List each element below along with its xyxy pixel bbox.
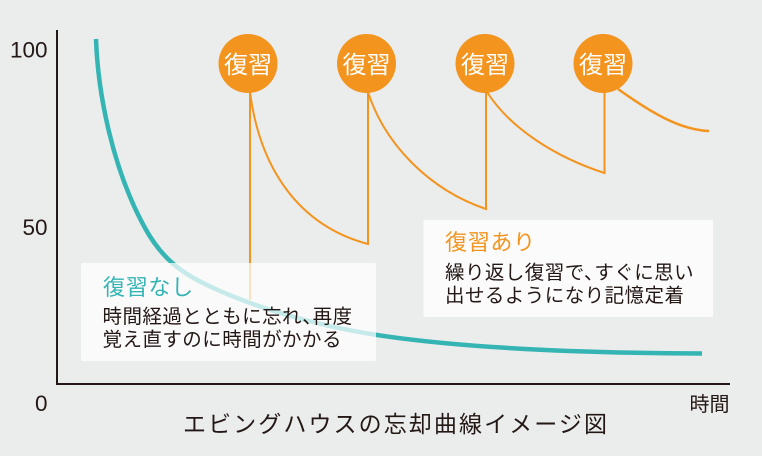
caption: エビングハウスの忘却曲線イメージ図	[183, 411, 607, 437]
badge: review 1	[218, 34, 278, 93]
badge: review 2	[337, 34, 396, 93]
badge: review 3	[456, 34, 514, 93]
text: without review description: 覚え直すのに時間がかかる	[102, 329, 342, 351]
text: with review description: 出せるようになり記憶定着	[445, 285, 684, 307]
y axis labels: 50	[22, 215, 48, 240]
y axis labels: 0	[35, 391, 48, 416]
x axis label: 時間	[690, 393, 730, 416]
heading: with review: 復習あり	[445, 230, 536, 255]
badge: review 3: 復習	[461, 52, 509, 79]
curve: without review	[96, 39, 702, 354]
text: with review description: 繰り返し復習で、すぐに思い	[445, 262, 694, 284]
badge: review 4: 復習	[579, 52, 627, 79]
badge: review 4	[574, 34, 632, 93]
badge: review 1: 復習	[224, 52, 272, 79]
panel: without review	[81, 263, 376, 361]
text: with review description	[445, 262, 694, 307]
heading: without review: 復習なし	[103, 275, 194, 300]
curve: with review	[250, 89, 709, 300]
axes	[57, 30, 730, 384]
y axis labels: 100	[10, 38, 48, 62]
text: without review description: 時間経過とともに忘れ、再度	[102, 306, 353, 328]
panel: with review	[424, 220, 713, 317]
text: without review description	[102, 306, 353, 351]
y axis labels	[10, 38, 48, 416]
badge: review 2: 復習	[342, 52, 390, 79]
